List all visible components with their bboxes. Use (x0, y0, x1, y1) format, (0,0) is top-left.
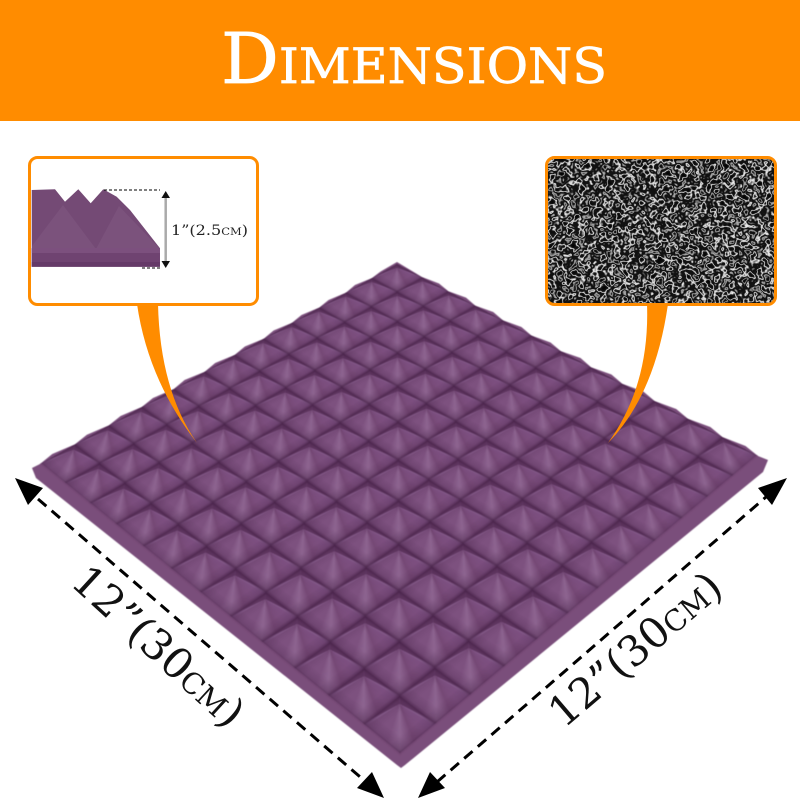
foam sheet silhouette and base (32, 262, 768, 768)
dimension arrow: right edge (418, 478, 787, 798)
callout box: texture (546, 158, 776, 304)
pyramid grid surface (40, 264, 758, 755)
title banner (0, 0, 800, 121)
callout: foam thickness (30, 158, 258, 443)
dimension label: left edge: 12”(30cm) (62, 555, 255, 737)
foam texture swatch (548, 159, 774, 303)
callout pointer: texture (608, 304, 668, 443)
panel: pyramid foam sheet (32, 262, 768, 768)
dimension label: right edge: 12”(30cm) (539, 562, 732, 737)
thickness label: 1”(2.5 cm) (171, 223, 248, 239)
title: DIMENSIONS (221, 18, 607, 100)
callout pointer: thickness (137, 304, 197, 443)
dimension arrow: left edge (15, 478, 384, 798)
callout: foam texture (546, 158, 776, 443)
callout box: thickness (30, 158, 258, 304)
height dimension: dashed guides and arrow (104, 190, 170, 268)
softened front edges of the sheet (40, 456, 758, 755)
foam cross-section (32, 189, 160, 267)
